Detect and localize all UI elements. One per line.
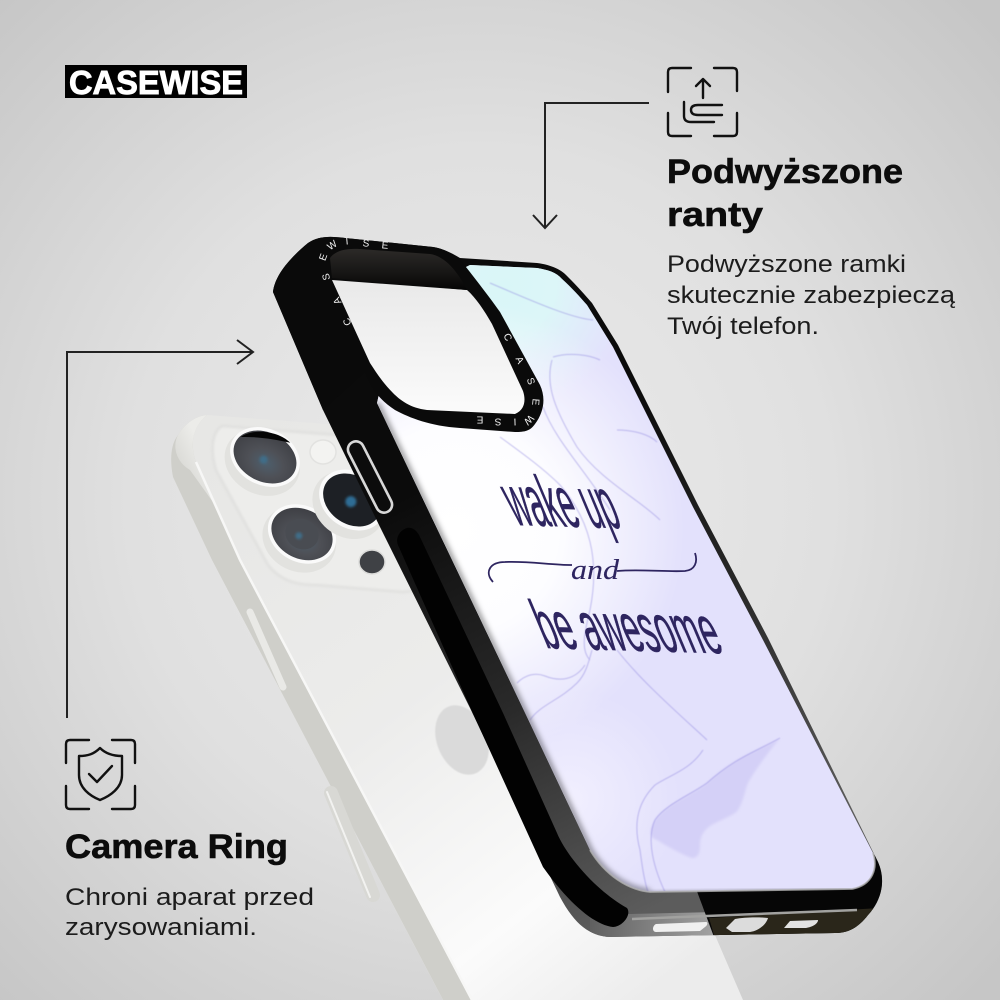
CASEWISE ring lettering: A <box>513 355 526 366</box>
heading: Podwyższone ranty: Podwyższone <box>667 153 903 191</box>
heading: Camera Ring: Camera Ring <box>65 828 288 866</box>
CASEWISE ring lettering: W <box>521 412 536 427</box>
cyan tint top <box>466 265 608 362</box>
white iPhone behind the case <box>171 414 743 1000</box>
panel edge highlight <box>590 850 875 892</box>
and flourish <box>489 553 696 582</box>
ring inner wall <box>330 249 467 290</box>
sensor <box>359 550 385 574</box>
CASEWISE ring lettering: S <box>494 416 501 426</box>
icon: raised edges <box>668 68 737 136</box>
CASEWISE ring lettering <box>318 236 541 427</box>
marble back panel <box>377 265 875 892</box>
side buttons <box>250 612 283 687</box>
band top highlight <box>175 415 215 505</box>
camera plateau <box>213 426 420 592</box>
CASEWISE ring lettering: C <box>501 332 514 343</box>
arrow: to camera ring <box>67 340 253 718</box>
white area <box>377 344 649 723</box>
text: camera ring description <box>65 884 314 941</box>
case print: wake up and be awesome: wake up <box>488 460 630 544</box>
text: camera ring description: Chroni aparat przed <box>65 884 314 911</box>
lens 3 <box>299 455 399 553</box>
CASEWISE ring lettering: C <box>341 316 354 327</box>
case lower lip details <box>590 854 882 937</box>
and: and <box>571 555 620 586</box>
heading: Podwyższone ranty <box>667 153 903 234</box>
lens 1 <box>213 414 312 509</box>
heading: Podwyższone ranty: ranty <box>667 196 763 234</box>
lighter lower left <box>530 722 616 850</box>
text: raised edges description <box>667 251 956 340</box>
lens 2 <box>251 492 349 585</box>
camera ring opening <box>332 280 524 414</box>
CASEWISE ring lettering: E <box>381 240 389 252</box>
CASEWISE ring lettering: I <box>513 415 517 427</box>
charging port and speaker cutouts <box>653 917 818 932</box>
CASEWISE ring lettering: I <box>345 236 349 248</box>
phone body <box>171 415 743 1000</box>
icon: shield with check <box>66 740 135 809</box>
CASEWISE ring lettering: S <box>321 272 333 281</box>
text: raised edges description: skutecznie zabezpieczą <box>667 282 956 309</box>
inner edge shadow <box>377 403 650 892</box>
CASEWISE ring lettering: A <box>331 295 344 306</box>
phone side band <box>171 415 472 1000</box>
side slot <box>397 528 628 927</box>
case print: wake up and be awesome <box>488 460 732 669</box>
text: raised edges description: Podwyższone ramki <box>667 251 906 278</box>
flash <box>310 440 336 464</box>
camera ring <box>273 237 543 432</box>
be awesome: be awesome <box>521 588 732 669</box>
apple logo <box>425 697 499 783</box>
volume button <box>345 439 395 515</box>
case shell <box>273 237 882 937</box>
arrow: to raised edges <box>533 103 649 228</box>
CASEWISE ring lettering: S <box>362 238 370 250</box>
CASEWISE ring lettering: W <box>326 238 340 253</box>
text: raised edges description: Twój telefon. <box>667 313 819 340</box>
text: camera ring description: zarysowaniami. <box>65 914 257 941</box>
CASEWISE ring lettering: E <box>476 414 483 424</box>
band inner highlight <box>196 462 472 1000</box>
black phone case <box>273 236 882 937</box>
marble veins <box>490 283 780 892</box>
CASEWISE ring lettering: S <box>524 376 536 387</box>
CASEWISE ring lettering: E <box>318 252 330 262</box>
large violet shape <box>651 738 780 858</box>
logo: CASEWISE: CASEWISE <box>69 64 243 101</box>
CASEWISE ring lettering: E <box>529 398 541 406</box>
